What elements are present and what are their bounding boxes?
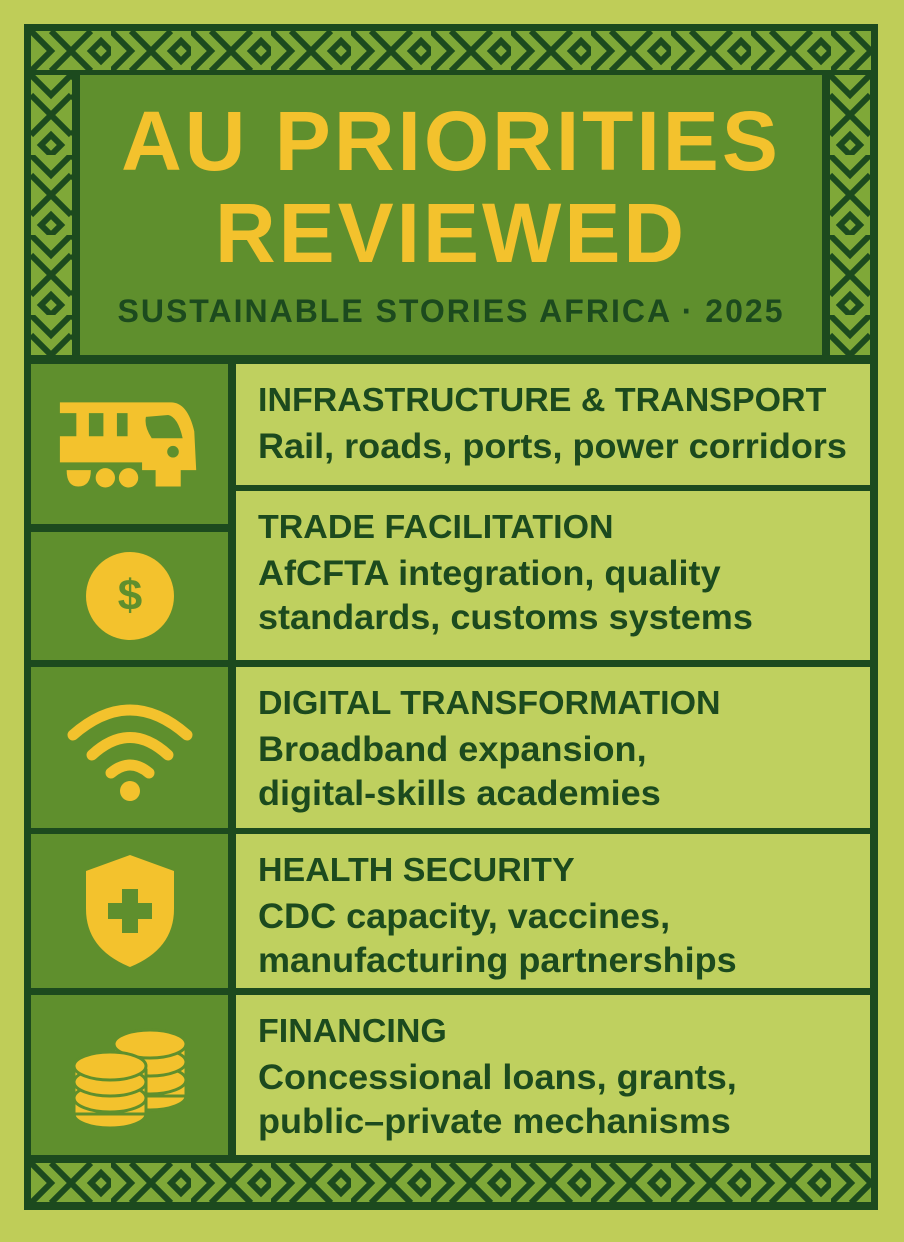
panel: financing [236,995,870,1155]
icon: dollar [31,532,228,660]
title: AU PRIORITIES [121,94,781,188]
panel: health: CDC capacity, vaccines, [258,897,670,936]
icon: train [31,364,228,524]
panel: digital: digital-skills academies [258,774,661,813]
panel: trade: AfCFTA integration, quality [258,554,721,593]
panel: infrastructure: Rail, roads, ports, power corridors [258,427,847,466]
icon: dollar: $ [117,571,142,620]
subtitle: SUSTAINABLE STORIES AFRICA · 2025 [118,293,784,329]
panel: digital: DIGITAL TRANSFORMATION [258,684,721,721]
panel: financing: public–private mechanisms [258,1102,731,1141]
panel: trade [236,491,870,660]
icon: shield [31,834,228,988]
panel: health: HEALTH SECURITY [258,851,575,888]
panel: digital: Broadband expansion, [258,730,647,769]
icon: wifi [31,667,228,828]
left border pattern [31,75,72,355]
panel: infrastructure: INFRASTRUCTURE & TRANSPORT [258,381,826,418]
icon: coins [31,995,228,1155]
panel: health [236,834,870,988]
panel: infrastructure [236,364,870,485]
panel: health: manufacturing partnerships [258,941,737,980]
panel: financing: Concessional loans, grants, [258,1058,737,1097]
panel: digital [236,667,870,828]
panel: trade: standards, customs systems [258,598,753,637]
title: REVIEWED [215,186,687,280]
right border pattern [830,75,870,355]
title [121,94,781,280]
bottom border pattern [31,1163,871,1202]
panel: financing: FINANCING [258,1012,447,1049]
top border pattern [31,31,871,70]
header panel [80,75,822,355]
panel: trade: TRADE FACILITATION [258,508,614,545]
